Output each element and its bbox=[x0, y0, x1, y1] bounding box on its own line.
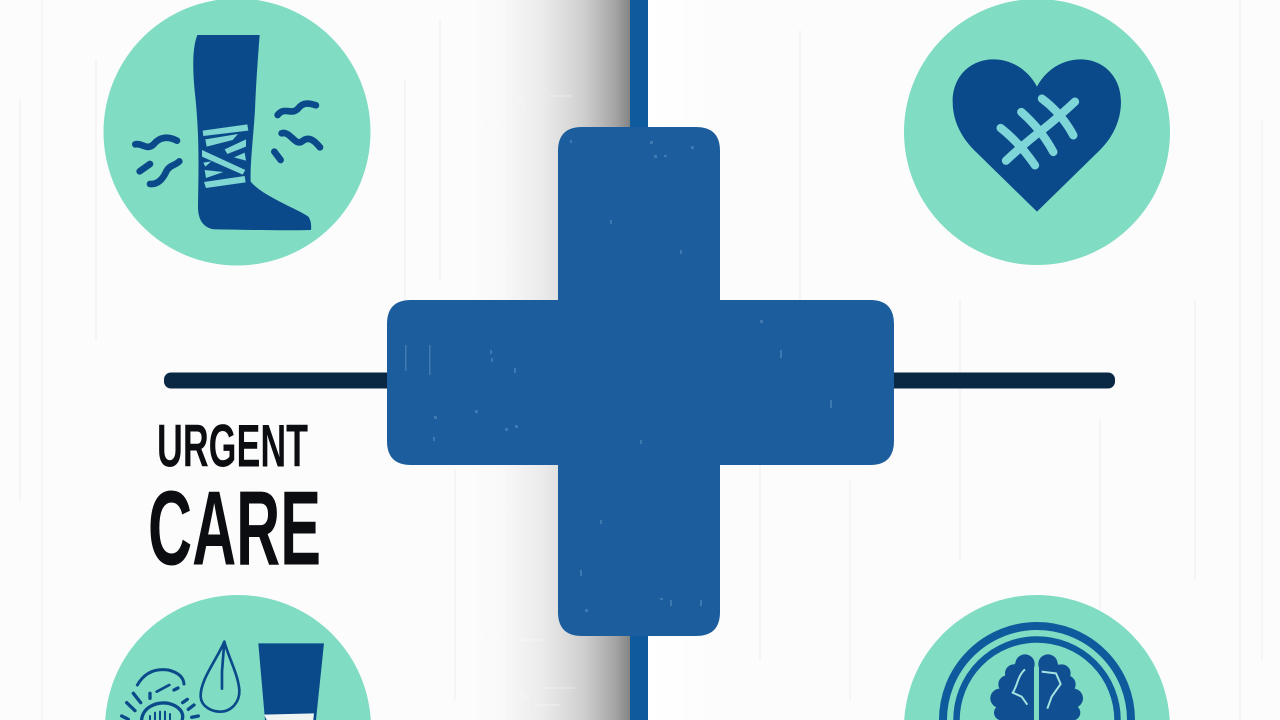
icon: wound care badge bbox=[105, 595, 371, 720]
title line: care: CARE bbox=[148, 470, 321, 588]
icon: bandaged leg badge bbox=[104, 0, 370, 266]
medical cross bbox=[387, 127, 894, 636]
horizontal navy line bbox=[164, 372, 1115, 388]
fold texture marks bbox=[512, 88, 575, 705]
fold shadow bbox=[470, 0, 631, 720]
title: urgent care bbox=[148, 412, 321, 588]
icon: brain badge bbox=[904, 595, 1170, 720]
icon: stitched heart badge bbox=[904, 0, 1170, 265]
right side highlight bbox=[648, 0, 718, 720]
title line: urgent: URGENT bbox=[157, 412, 308, 480]
vertical blue line bbox=[630, 0, 648, 720]
